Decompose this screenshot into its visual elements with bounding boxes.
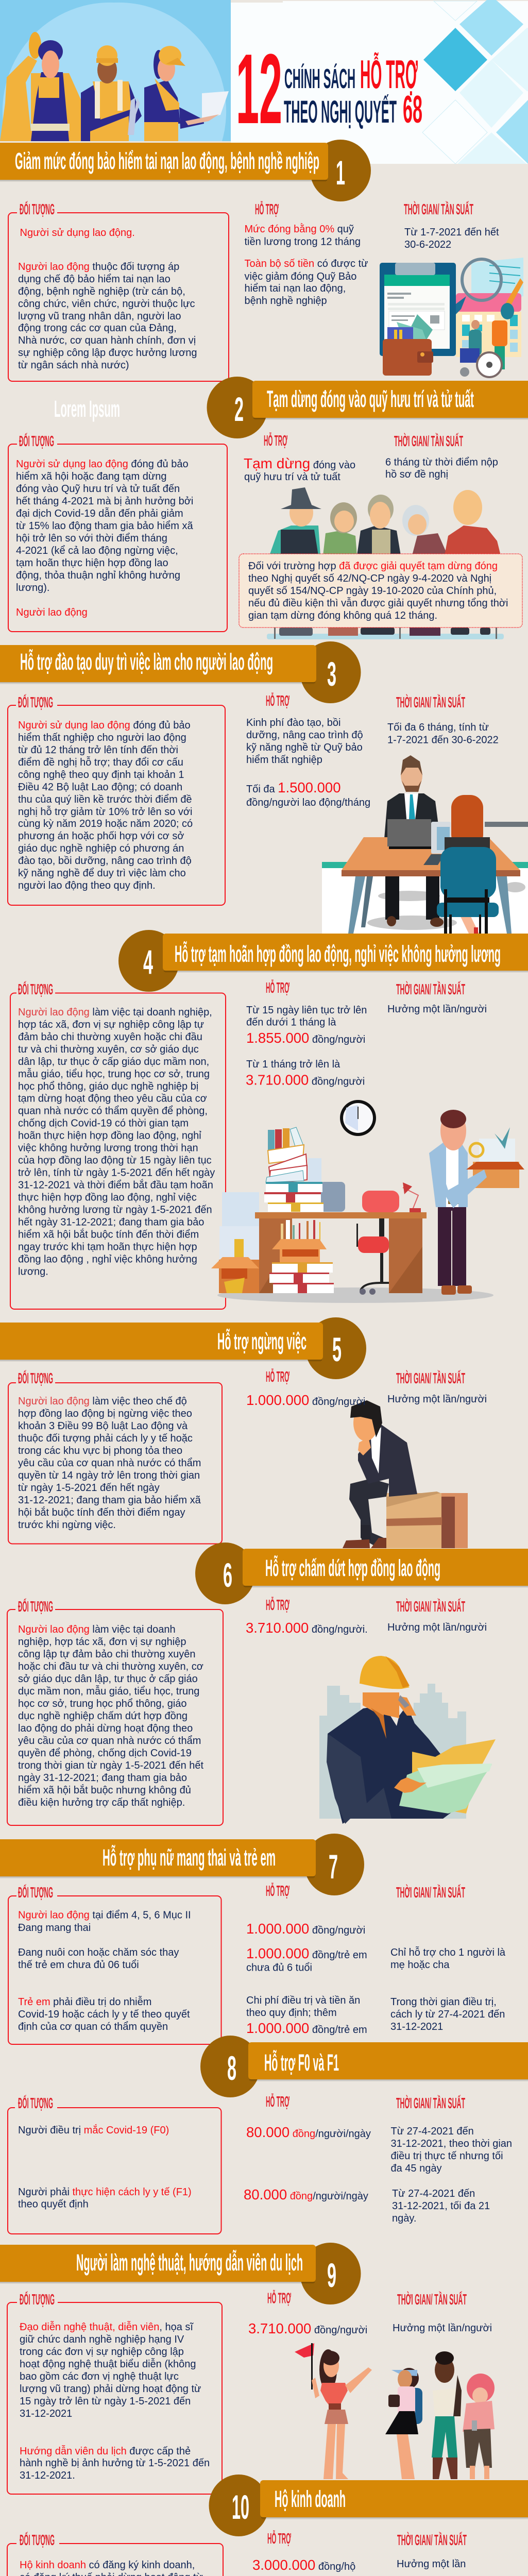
text: đối tượng: hoạt động nghệ thuật biểu diễn (không xyxy=(20,2358,196,2370)
text: hỗ trợ: Toàn bộ số tiền có được từ xyxy=(244,258,368,269)
text: đối tượng: Trẻ em phải điều trị do nhiễm xyxy=(18,1996,151,2008)
box: đối tượng xyxy=(7,2302,222,2494)
text: đối tượng: định của cơ quan có thẩm quyền xyxy=(18,2021,168,2032)
text: đối tượng: sự nghiệp công lập được hưởng lương xyxy=(18,347,197,359)
illustration: three construction workers xyxy=(0,0,231,141)
text: đối tượng: hết tháng 4-2021 mà bị ảnh hưởng bởi xyxy=(16,496,193,507)
text: đối tượng: dục nghề nghiệp chấm dứt hợp đồng xyxy=(18,1710,188,1722)
text: đối tượng xyxy=(20,2321,210,2481)
section 10 xyxy=(7,2475,528,2576)
text: thời gian: Hưởng một lần/người xyxy=(393,2323,492,2334)
number badge 7 xyxy=(304,1834,364,1895)
text: hỗ trợ: Từ 15 ngày liên tục trở lên xyxy=(246,1005,367,1016)
header panel xyxy=(0,0,528,164)
text: thời gian: ngày. xyxy=(392,2213,416,2224)
text: đối tượng: thu của quý liền kề trước thời điểm đề xyxy=(18,794,192,805)
banner 5 xyxy=(0,1323,323,1362)
text: đối tượng: hiểm xã hội bắt buộc nhưng không đủ xyxy=(18,1784,191,1796)
text: đối tượng: Đang nuôi con hoặc chăm sóc thay xyxy=(18,1947,179,1958)
text: đối tượng: Người lao động tại điểm 4, 5, 6 Mục II xyxy=(18,1909,191,1921)
section 9: 9 xyxy=(327,2256,336,2294)
text: đối tượng: điểm đề nghị hỗ trợ; thay đổi cơ cấu xyxy=(18,756,183,768)
section 9: HỖ TRỢ xyxy=(267,2290,291,2307)
section 7: 7 xyxy=(329,1848,338,1886)
section 3: HỖ TRỢ xyxy=(266,692,289,709)
text: đối tượng: hội bắt buộc tính đến thời điểm ngay xyxy=(18,1506,185,1518)
text: hỗ trợ xyxy=(246,1005,367,1088)
text: đối tượng xyxy=(16,459,193,618)
text: đối tượng: Nhà nước, cơ quan hành chính, đơn vị xyxy=(18,335,196,346)
section 3: 3 xyxy=(327,655,336,693)
text: thời gian: 31-12-2021, theo thời gian xyxy=(390,2138,512,2149)
banner 10 xyxy=(260,2480,528,2519)
text: đối tượng: theo quyết định xyxy=(18,2199,89,2210)
text: thời gian: 31-12-2021 xyxy=(390,2021,443,2032)
section 2 xyxy=(8,377,528,639)
text: thời gian: Chỉ hỗ trợ cho 1 người là xyxy=(390,1946,506,1958)
text: thời gian xyxy=(390,2126,512,2224)
text: đối tượng: Người điều trị mắc Covid-19 (F0) xyxy=(18,2124,169,2136)
text: thời gian: 1-7-2021 đến 30-6-2022 xyxy=(387,735,499,746)
text: đối tượng: động trong các cơ quan của Đảng, xyxy=(18,323,177,334)
text: đối tượng xyxy=(18,1007,215,1278)
text: thời gian: Tối đa 6 tháng, tính từ xyxy=(387,722,489,733)
text: hỗ trợ: đồng/người lao động/tháng xyxy=(246,797,370,808)
callout: tạm dừng đóng: theo Nghị quyết số 42/NQ-CP ngày 9-4-2020 và Nghị xyxy=(248,573,491,584)
text: đối tượng: trở lên, tính từ ngày 1-5-2021 đến hết ngày xyxy=(18,1167,215,1179)
text: đối tượng: Người lao động làm việc theo chế độ xyxy=(18,1396,187,1407)
text: đối tượng: lao động do phải dừng hoạt động theo xyxy=(18,1723,193,1734)
text: hỗ trợ: Mức đóng bằng 0% quỹ xyxy=(244,223,354,235)
section 6: 6 xyxy=(223,1556,232,1594)
text: thời gian: Hưởng một lần/người xyxy=(387,1394,487,1405)
text: đối tượng: giáo dục nghề nghiệp có phương án xyxy=(18,843,184,854)
box: đối tượng xyxy=(8,705,225,905)
section 5: ĐỐI TƯỢNG xyxy=(18,1369,53,1387)
text: đối tượng: lượng vũ trang nhân dân, người lao xyxy=(18,311,181,322)
number 4: 4 xyxy=(143,943,153,981)
section 7 xyxy=(0,1834,506,2044)
text: hỗ trợ: 80.000 đồng/người/ngày xyxy=(246,2124,371,2140)
text: đối tượng: Đạo diễn nghệ thuật, diễn viên, họa sĩ xyxy=(20,2321,194,2333)
text: đối tượng: không hưởng lương từ ngày 1-5-2021 đến xyxy=(18,1205,212,1216)
illustration: insurance document, wallet, calendar, wheelchair xyxy=(380,258,523,377)
section 4: ĐỐI TƯỢNG xyxy=(18,980,53,998)
section 3: ĐỐI TƯỢNG xyxy=(18,693,53,711)
section 4 xyxy=(10,930,528,1309)
text: đối tượng: dục mầm non, mẫu giáo, tiểu học, trung xyxy=(18,1685,199,1697)
callout: tạm dừng đóng xyxy=(239,554,522,628)
text: đối tượng: yêu cầu của cơ quan nhà nước có thẩm xyxy=(18,1458,201,1469)
text: đối tượng: trước khi ngừng việc. xyxy=(18,1519,116,1531)
text: đối tượng: hợp tác xã, đơn vị sự nghiệp công lập tự xyxy=(18,1019,204,1030)
text: hỗ trợ: hiểm thất nghiệp xyxy=(246,754,322,766)
text: đối tượng: Covid-19 hoặc cách ly y tế theo quyết xyxy=(18,2009,190,2020)
box: đối tượng xyxy=(8,1383,222,1544)
text: thời gian xyxy=(387,722,499,746)
text: đối tượng: quyền để phòng, chống dịch Covid-19 xyxy=(18,1748,192,1759)
banner 8: Hỗ trợ F0 và F1 xyxy=(264,2049,339,2076)
text: đối tượng: Người lao động làm việc tại doanh xyxy=(18,1624,176,1635)
text: đối tượng: dân lập, tư thục ở cấp giáo dục mầm non, xyxy=(18,1056,209,1067)
text: đối tượng: công chức, viên chức, người thuộc lực xyxy=(18,298,195,310)
text: đối tượng: Người sử dụng lao động đóng đủ bảo xyxy=(18,720,191,731)
text: hỗ trợ: Chi phí điều trị và tiền ăn xyxy=(246,1995,360,2006)
text: đối tượng: hợp đồng lao động bị ngừng việc theo xyxy=(18,1408,192,1419)
text: thời gian xyxy=(404,227,499,250)
text: đối tượng: thế trẻ em chưa đủ 06 tuổi xyxy=(18,1959,139,1971)
section 5: HỖ TRỢ xyxy=(266,1368,289,1385)
section 8: 8 xyxy=(227,2049,236,2087)
banner 8 xyxy=(248,2042,528,2081)
text: đối tượng: khoản 3 Điều 99 Bộ luật Lao động và xyxy=(18,1420,188,1432)
number badge 3 xyxy=(300,641,361,703)
text: thời gian: 30-6-2022 xyxy=(404,239,451,250)
section 6 xyxy=(7,1543,528,1825)
text: đối tượng: phương án hoặc phối hợp với cơ sở xyxy=(18,831,184,842)
text: đối tượng: học cơ sở, trung học phổ thông, giáo xyxy=(18,1698,187,1709)
text: hỗ trợ: kỹ năng nghề từ Quỹ bảo xyxy=(246,742,363,753)
box: đối tượng xyxy=(7,1609,223,1825)
text: đối tượng: trong các khu vực bị phong tỏa theo xyxy=(18,1445,182,1456)
banner 10: Hộ kinh doanh xyxy=(275,2486,346,2512)
text: thời gian: cách ly từ 27-4-2021 đến xyxy=(390,2009,505,2020)
section 8: ĐỐI TƯỢNG xyxy=(18,2094,53,2112)
text: đối tượng: hoặc chi đầu tư và chi thường xuyên, cơ xyxy=(18,1661,203,1672)
text: hỗ trợ: bệnh nghề nghiệp xyxy=(244,295,327,307)
text: đối tượng: đại dịch Covid-19 dẫn đến phải giảm xyxy=(16,507,183,519)
section 5: 5 xyxy=(332,1330,342,1368)
section 1: 1 xyxy=(336,154,345,192)
text: đối tượng: Người sử dụng lao động đóng đủ bảo xyxy=(16,459,189,470)
illustration: office workers at desk xyxy=(322,755,528,934)
text: đối tượng: hiểm thất nghiệp cho người lao động xyxy=(18,732,186,743)
text: đối tượng: hiểm xã hội hoặc đang tạm dừng xyxy=(16,471,166,482)
text: thời gian: mẹ hoặc cha xyxy=(390,1959,450,1971)
section 2: ĐỐI TƯỢNG xyxy=(19,432,54,450)
text: đối tượng: tạm hoãn thực hiện hợp đồng lao xyxy=(16,557,168,569)
text: hỗ trợ: Kinh phí đào tạo, bồi xyxy=(246,717,340,728)
box: đối tượng xyxy=(10,993,226,1309)
text: đối tượng: hội trở lên so với thời điểm tháng xyxy=(16,533,167,544)
text: đối tượng: Điều 42 Bộ luật Lao động; có doanh xyxy=(18,782,182,793)
text: đối tượng xyxy=(20,2560,203,2576)
text: đối tượng: động, bệnh nghề nghiệp (trừ cán bộ, xyxy=(18,286,185,297)
text: đối tượng: hết ngày 31-12-2021; đang tham gia bảo xyxy=(18,1217,204,1228)
box: đối tượng xyxy=(7,2544,223,2576)
text: đối tượng: 4-2021 (kể cả lao động ngừng việc, xyxy=(16,545,178,556)
text: đối tượng: 31-12-2021 xyxy=(20,2408,72,2419)
text: đối tượng xyxy=(18,2124,192,2210)
section 7: ĐỐI TƯỢNG xyxy=(18,1884,53,1901)
text: thời gian: Hưởng một lần xyxy=(397,2558,466,2570)
section 3 xyxy=(0,641,528,934)
banner 7: Hỗ trợ phụ nữ mang thai và trẻ em xyxy=(103,1844,276,1871)
box: đối tượng xyxy=(8,444,227,632)
section 2: HỖ TRỢ xyxy=(264,432,287,449)
text: hỗ trợ: Tạm dừng đóng vào xyxy=(244,455,355,471)
text: thời gian: Từ 1-7-2021 đến hết xyxy=(404,227,499,238)
title: 12 xyxy=(236,33,282,144)
text: thời gian xyxy=(390,1946,506,2032)
text: hỗ trợ: 3.710.000 đồng/người xyxy=(248,2320,367,2336)
banner 6 xyxy=(243,1549,528,1588)
banner 2 xyxy=(252,381,528,420)
text: thời gian: Từ 27-4-2021 đến xyxy=(390,2126,474,2137)
illustration: packing up office desk xyxy=(211,1100,524,1303)
text: đối tượng: việc không hưởng lương trong thời hạn xyxy=(18,1143,198,1154)
text: đối tượng: hiểm xã hội bắt buộc tính đến thời điểm xyxy=(18,1228,199,1241)
text: thời gian: hồ sơ đề nghị xyxy=(385,469,448,480)
section 2: Lorem Ipsum xyxy=(54,396,120,422)
section 1: HỖ TRỢ xyxy=(255,200,279,218)
section 1 xyxy=(0,140,523,381)
banner 3 xyxy=(0,645,316,684)
text: đối tượng: Người lao động thuộc đối tượng áp xyxy=(18,261,179,273)
text: hỗ trợ: Từ 1 tháng trở lên là xyxy=(246,1059,340,1070)
callout: tạm dừng đóng: gian tạm dừng đóng không quá 12 tháng. xyxy=(248,610,437,621)
text: hỗ trợ: chưa đủ 6 tuổi xyxy=(246,1962,312,1973)
text: đối tượng: từ ngân sách nhà nước) xyxy=(18,360,129,371)
text: hỗ trợ xyxy=(246,1921,367,2036)
text: đối tượng: lương. xyxy=(18,1266,48,1278)
number badge 2 xyxy=(207,377,268,438)
section 8: HỖ TRỢ xyxy=(266,2093,289,2110)
number badge 10 xyxy=(209,2475,269,2536)
box: đối tượng xyxy=(8,1896,222,2044)
text: đối tượng: Người phải thực hiện cách ly y tế (F1) xyxy=(18,2187,192,2198)
title xyxy=(236,33,422,144)
number badge 1 xyxy=(310,140,371,201)
text: hỗ trợ: 3.710.000 đồng/người. xyxy=(246,1620,368,1636)
banner 4 xyxy=(163,934,528,973)
text: đối tượng: học phổ thông, giáo dục nghề nghiệp bị xyxy=(18,1081,198,1092)
text: đối tượng: đồng lao động , nghỉ việc không hưởng xyxy=(18,1254,197,1265)
text: thời gian: đa 45 ngày xyxy=(390,2163,441,2174)
illustration: engineer on phone with blueprint xyxy=(319,1656,496,1824)
text: đối tượng xyxy=(18,720,193,891)
text: đối tượng: nghị hỗ trợ giảm từ 10% trở lên so với xyxy=(18,806,192,818)
text: đối tượng: đào tạo, bồi dưỡng, nâng cao trình độ xyxy=(18,855,192,867)
section 6: ĐỐI TƯỢNG xyxy=(18,1598,53,1615)
text: đối tượng: điều kiện hưởng trợ cấp thất nghiệp. xyxy=(18,1797,185,1808)
text: hỗ trợ xyxy=(244,223,368,307)
text: đối tượng: từ ngày 1-5-2021 đến hết ngày xyxy=(18,1482,160,1494)
text: đối tượng: trong thời gian từ ngày 1-5-2021 đến hết xyxy=(18,1760,204,1771)
section 9: ĐỐI TƯỢNG xyxy=(20,2291,55,2308)
text: hỗ trợ: 1.000.000 đồng/trẻ em xyxy=(246,2020,367,2036)
text: đối tượng: 31-12-2021. xyxy=(20,2470,75,2481)
text: đối tượng: yêu cầu của cơ quan nhà nước có thẩm xyxy=(18,1735,201,1747)
callout: tạm dừng đóng: quyết số 154/NQ-CP ngày 19-10-2020 của Chính phủ, xyxy=(248,585,497,597)
text: đối tượng: dụng chế độ bảo hiểm tai nạn lao xyxy=(18,274,171,285)
text: đối tượng: của hợp đồng lao động từ 15 ngày liên tục xyxy=(18,1155,212,1166)
text: thời gian: Hưởng một lần/người xyxy=(387,1622,487,1633)
text: hỗ trợ: dưỡng, nâng cao trình độ xyxy=(246,730,363,741)
text: đối tượng: tư và chi thường xuyên, cơ sở giáo dục xyxy=(18,1044,199,1055)
text: thời gian: 31-12-2021, tối đa 21 xyxy=(392,2200,490,2212)
text: thời gian: Trong thời gian điều trị, xyxy=(390,1996,497,2008)
text: đối tượng: 31-12-2021 và thời điểm bắt đầu tạm hoãn xyxy=(18,1179,213,1191)
text: đối tượng: hành nghề bị ảnh hưởng từ 1-5-2021 đến xyxy=(20,2458,210,2469)
text: đối tượng: cùng kỳ năm 2019 hoặc năm 2020; có xyxy=(18,818,193,829)
text: đối tượng: giữ chức danh nghề nghiệp hạng IV xyxy=(20,2334,184,2345)
banner 7 xyxy=(0,1839,316,1878)
text: thời gian xyxy=(385,456,498,480)
text: đối tượng: mẫu giáo, tiểu học, trung học cơ sở, trung xyxy=(18,1068,210,1080)
text: hỗ trợ: Tối đa 1.500.000 xyxy=(246,779,341,795)
text: đối tượng: lượng vũ trang) phải dừng hoạt động từ xyxy=(20,2383,201,2395)
text: đối tượng: Người lao động xyxy=(16,607,88,618)
section 6: HỖ TRỢ xyxy=(266,1596,289,1614)
number badge 8 xyxy=(200,2036,260,2097)
text: đối tượng: Người sử dụng lao động. xyxy=(20,227,135,239)
text: đối tượng: nghiệp, hợp tác xã, đơn vị sự nghiệp xyxy=(18,1636,186,1648)
section 4: HỖ TRỢ xyxy=(266,979,289,996)
text: đối tượng xyxy=(18,1909,191,2032)
section 9 xyxy=(0,2243,495,2494)
text: hỗ trợ: 1.855.000 đồng/người xyxy=(246,1030,365,1046)
text: đối tượng: 31-12-2021; đang tham gia bảo hiểm xã xyxy=(18,1495,201,1506)
text: đối tượng: từ 15% lao động tham gia bảo hiểm xã xyxy=(16,520,193,532)
banner 1 xyxy=(0,143,328,182)
text: đối tượng: quan nhà nước có thẩm quyền để phòng, xyxy=(18,1106,208,1117)
callout: tạm dừng đóng: Đối với trường hợp đã được giải quyết tạm dừng đóng xyxy=(248,561,498,572)
text: đối tượng: ngày 31-12-2021; đang tham gia bảo xyxy=(18,1772,187,1784)
text: hỗ trợ: 3.000.000 đồng/hộ xyxy=(252,2557,355,2573)
section 1: ĐỐI TƯỢNG xyxy=(20,200,55,218)
text: thời gian: điều trị thực tế nhưng tối xyxy=(390,2150,503,2162)
text: hỗ trợ: 1.000.000 đồng/người xyxy=(246,1921,365,1937)
text: hỗ trợ xyxy=(246,717,370,808)
text: đối tượng: thuộc đối tượng phải cách ly y tế hoặc xyxy=(18,1433,193,1444)
text: hỗ trợ: việc giảm đóng Quỹ Bảo xyxy=(244,271,356,282)
text: thời gian: Từ 27-4-2021 đến xyxy=(392,2188,475,2199)
text: hỗ trợ: 80.000 đồng/người/ngày xyxy=(244,2187,368,2202)
text: đối tượng: Người lao động làm việc tại doanh nghiệp, xyxy=(18,1007,212,1018)
text: hỗ trợ: quỹ hưu trí và tử tuất xyxy=(244,471,340,483)
text: đối tượng: động, thỏa thuận nghỉ không hưởng xyxy=(16,570,180,581)
text: đối tượng: công lập tự đảm bảo chi thường xuyên xyxy=(18,1649,196,1660)
callout: tạm dừng đóng: nếu đủ điều kiện thì vẫn được giải quyết nhưng tổng thời xyxy=(248,597,508,609)
box: đối tượng xyxy=(8,213,229,381)
text: đối tượng: chống dịch Covid-19 có thời gian tạm xyxy=(18,1118,189,1129)
text: hỗ trợ: theo quy định; thêm xyxy=(246,2007,337,2019)
number badge 6 xyxy=(195,1543,255,1604)
section 10: HỖ TRỢ xyxy=(267,2530,291,2547)
text: đối tượng: Đang mang thai xyxy=(18,1922,91,1934)
number badge 4 xyxy=(118,930,179,992)
text: hỗ trợ: đến dưới 1 tháng là xyxy=(246,1017,336,1028)
text: đối tượng: bao gồm các đơn vị nghệ thuật lực xyxy=(20,2371,179,2382)
text: hỗ trợ: 1.000.000 đồng/người xyxy=(246,1392,365,1408)
section 10: ĐỐI TƯỢNG xyxy=(20,2531,55,2549)
text: đối tượng: Hộ kinh doanh có đăng ký kinh doanh, xyxy=(20,2560,195,2571)
text: thời gian: 6 tháng từ thời điểm nộp xyxy=(385,456,498,468)
text: hỗ trợ xyxy=(244,455,355,483)
section 7: HỖ TRỢ xyxy=(266,1882,289,1900)
number badge 5 xyxy=(305,1317,366,1379)
text: đối tượng xyxy=(18,1396,201,1531)
illustration: man sitting on cardboard box xyxy=(343,1400,468,1548)
text: đối tượng: đảm bảo chi thường xuyên hoặc chi đầu xyxy=(18,1031,202,1043)
title: CHÍNH SÁCH xyxy=(284,63,355,94)
illustration: tour guide and tourists xyxy=(295,2343,495,2479)
text: hỗ trợ xyxy=(244,2124,371,2202)
text: đối tượng: thực hiện hợp đồng lao động, nghỉ việc xyxy=(18,1192,197,1204)
text: đối tượng: kỹ năng nghề để duy trì việc làm cho xyxy=(18,868,186,879)
header panel: HỖ TRỢ xyxy=(360,52,418,97)
text: đối tượng: công nghệ theo quy định tại khoản 1 xyxy=(18,769,184,781)
text: hỗ trợ: 3.710.000 đồng/người xyxy=(246,1072,365,1088)
banner 5: Hỗ trợ ngừng việc xyxy=(217,1328,306,1354)
text: đối tượng xyxy=(18,227,197,371)
text: đối tượng: sở giáo dục dân lập, tư thục ở cấp giáo xyxy=(18,1673,198,1685)
text: đối tượng: 15 ngày trở lên từ ngày 1-5-2021 đến xyxy=(20,2396,191,2407)
text: đối tượng xyxy=(18,1624,204,1808)
text: đối tượng: quyền từ 14 ngày trở lên trong thời gian xyxy=(18,1470,200,1481)
number badge 9 xyxy=(300,2243,361,2304)
text: đối tượng: người lao động theo quy định. xyxy=(18,880,156,891)
section 2: 2 xyxy=(234,390,244,428)
section 8 xyxy=(8,2036,528,2234)
text: hỗ trợ: hiểm tai nạn lao động, xyxy=(244,283,346,294)
text: thời gian: Hưởng một lần/người xyxy=(387,1004,487,1015)
section 10: 10 xyxy=(232,2488,249,2526)
text: đối tượng: lương). xyxy=(16,582,49,594)
text: hỗ trợ: 1.000.000 đồng/trẻ em xyxy=(246,1945,367,1961)
text: hỗ trợ: tiền lương trong 12 tháng xyxy=(244,236,361,247)
text: đối tượng: Hướng dẫn viên du lịch được cấp thẻ xyxy=(20,2445,191,2457)
text: đối tượng: tạm dừng hoạt động theo yêu cầu của cơ xyxy=(18,1093,207,1105)
box: đối tượng xyxy=(8,2108,222,2234)
text: đối tượng: từ đủ 12 tháng trở lên tính đến thời xyxy=(18,744,178,756)
header panel: 68 xyxy=(403,88,422,131)
text: đối tượng: trong các đơn vị sự nghiệp công lập xyxy=(20,2346,184,2358)
decorative diamond background xyxy=(231,0,528,164)
text: đối tượng: đóng vào Quỹ hưu trí và tử tuất đến xyxy=(16,483,180,495)
illustration: elderly people xyxy=(267,487,504,639)
text: đối tượng: hoãn thực hiện hợp đồng lao động, nghỉ xyxy=(18,1130,201,1142)
banner 9 xyxy=(0,2245,316,2284)
section 5 xyxy=(0,1317,487,1548)
text: đối tượng: ngay trước khi tạm hoãn thực hiện hợp xyxy=(18,1242,197,1253)
